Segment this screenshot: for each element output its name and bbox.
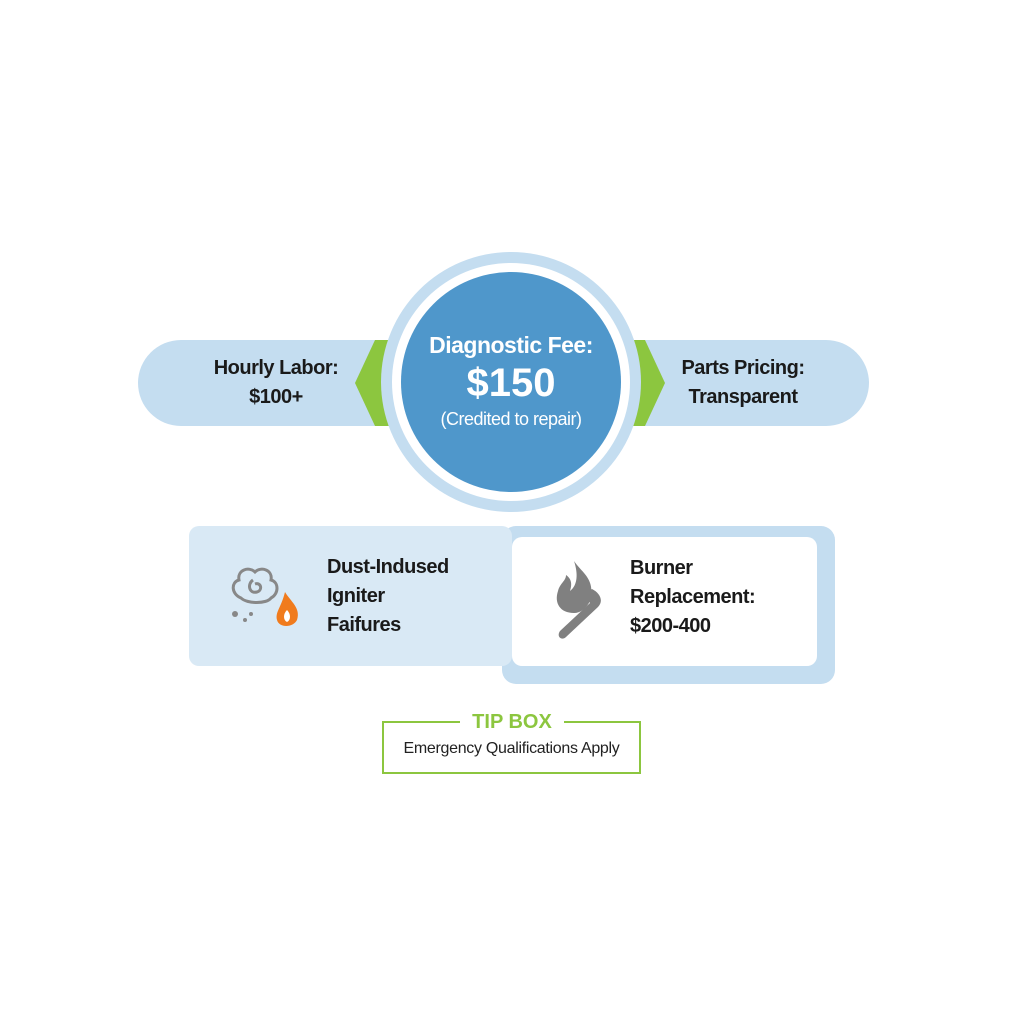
text: dust igniter: Faifures — [327, 614, 401, 636]
text: burner: Replacement: — [630, 586, 755, 608]
text: parts pricing: Parts Pricing: — [681, 357, 805, 379]
pill: hourly labor — [138, 340, 438, 426]
pill: parts pricing — [585, 340, 869, 426]
arrow: left chevron — [355, 340, 395, 426]
text: dust igniter: Igniter — [327, 585, 385, 607]
text: parts pricing — [681, 357, 805, 408]
card: burner replacement — [512, 537, 817, 666]
card: dust igniter — [189, 526, 512, 666]
text: tip: Emergency Qualifications Apply — [403, 740, 620, 757]
text: diagnostic fee — [429, 332, 593, 429]
text: parts pricing: Transparent — [688, 386, 797, 408]
tip box — [382, 721, 641, 774]
icon: flame wrench — [556, 561, 601, 639]
text: burner — [630, 557, 755, 637]
text: dust igniter: Dust-Indused — [327, 556, 449, 578]
card: right backing — [502, 526, 835, 684]
text: burner: $200-400 — [630, 615, 711, 637]
text: burner: Burner — [630, 557, 693, 579]
icon: dust with flame — [232, 568, 298, 626]
text: hourly labor — [214, 357, 338, 408]
text: diagnostic fee: (Credited to repair) — [440, 409, 582, 429]
heading: tip box: TIP BOX — [472, 711, 552, 733]
text: hourly labor: Hourly Labor: — [214, 357, 338, 379]
text: diagnostic fee: Diagnostic Fee: — [429, 332, 593, 358]
arrow: right chevron — [625, 340, 665, 426]
text: dust igniter — [327, 556, 449, 636]
text: diagnostic fee: $150 — [466, 361, 555, 405]
circle: diagnostic fee — [381, 252, 641, 512]
text: hourly labor: $100+ — [249, 386, 303, 408]
diagram: diagnostic fee band — [138, 252, 869, 512]
